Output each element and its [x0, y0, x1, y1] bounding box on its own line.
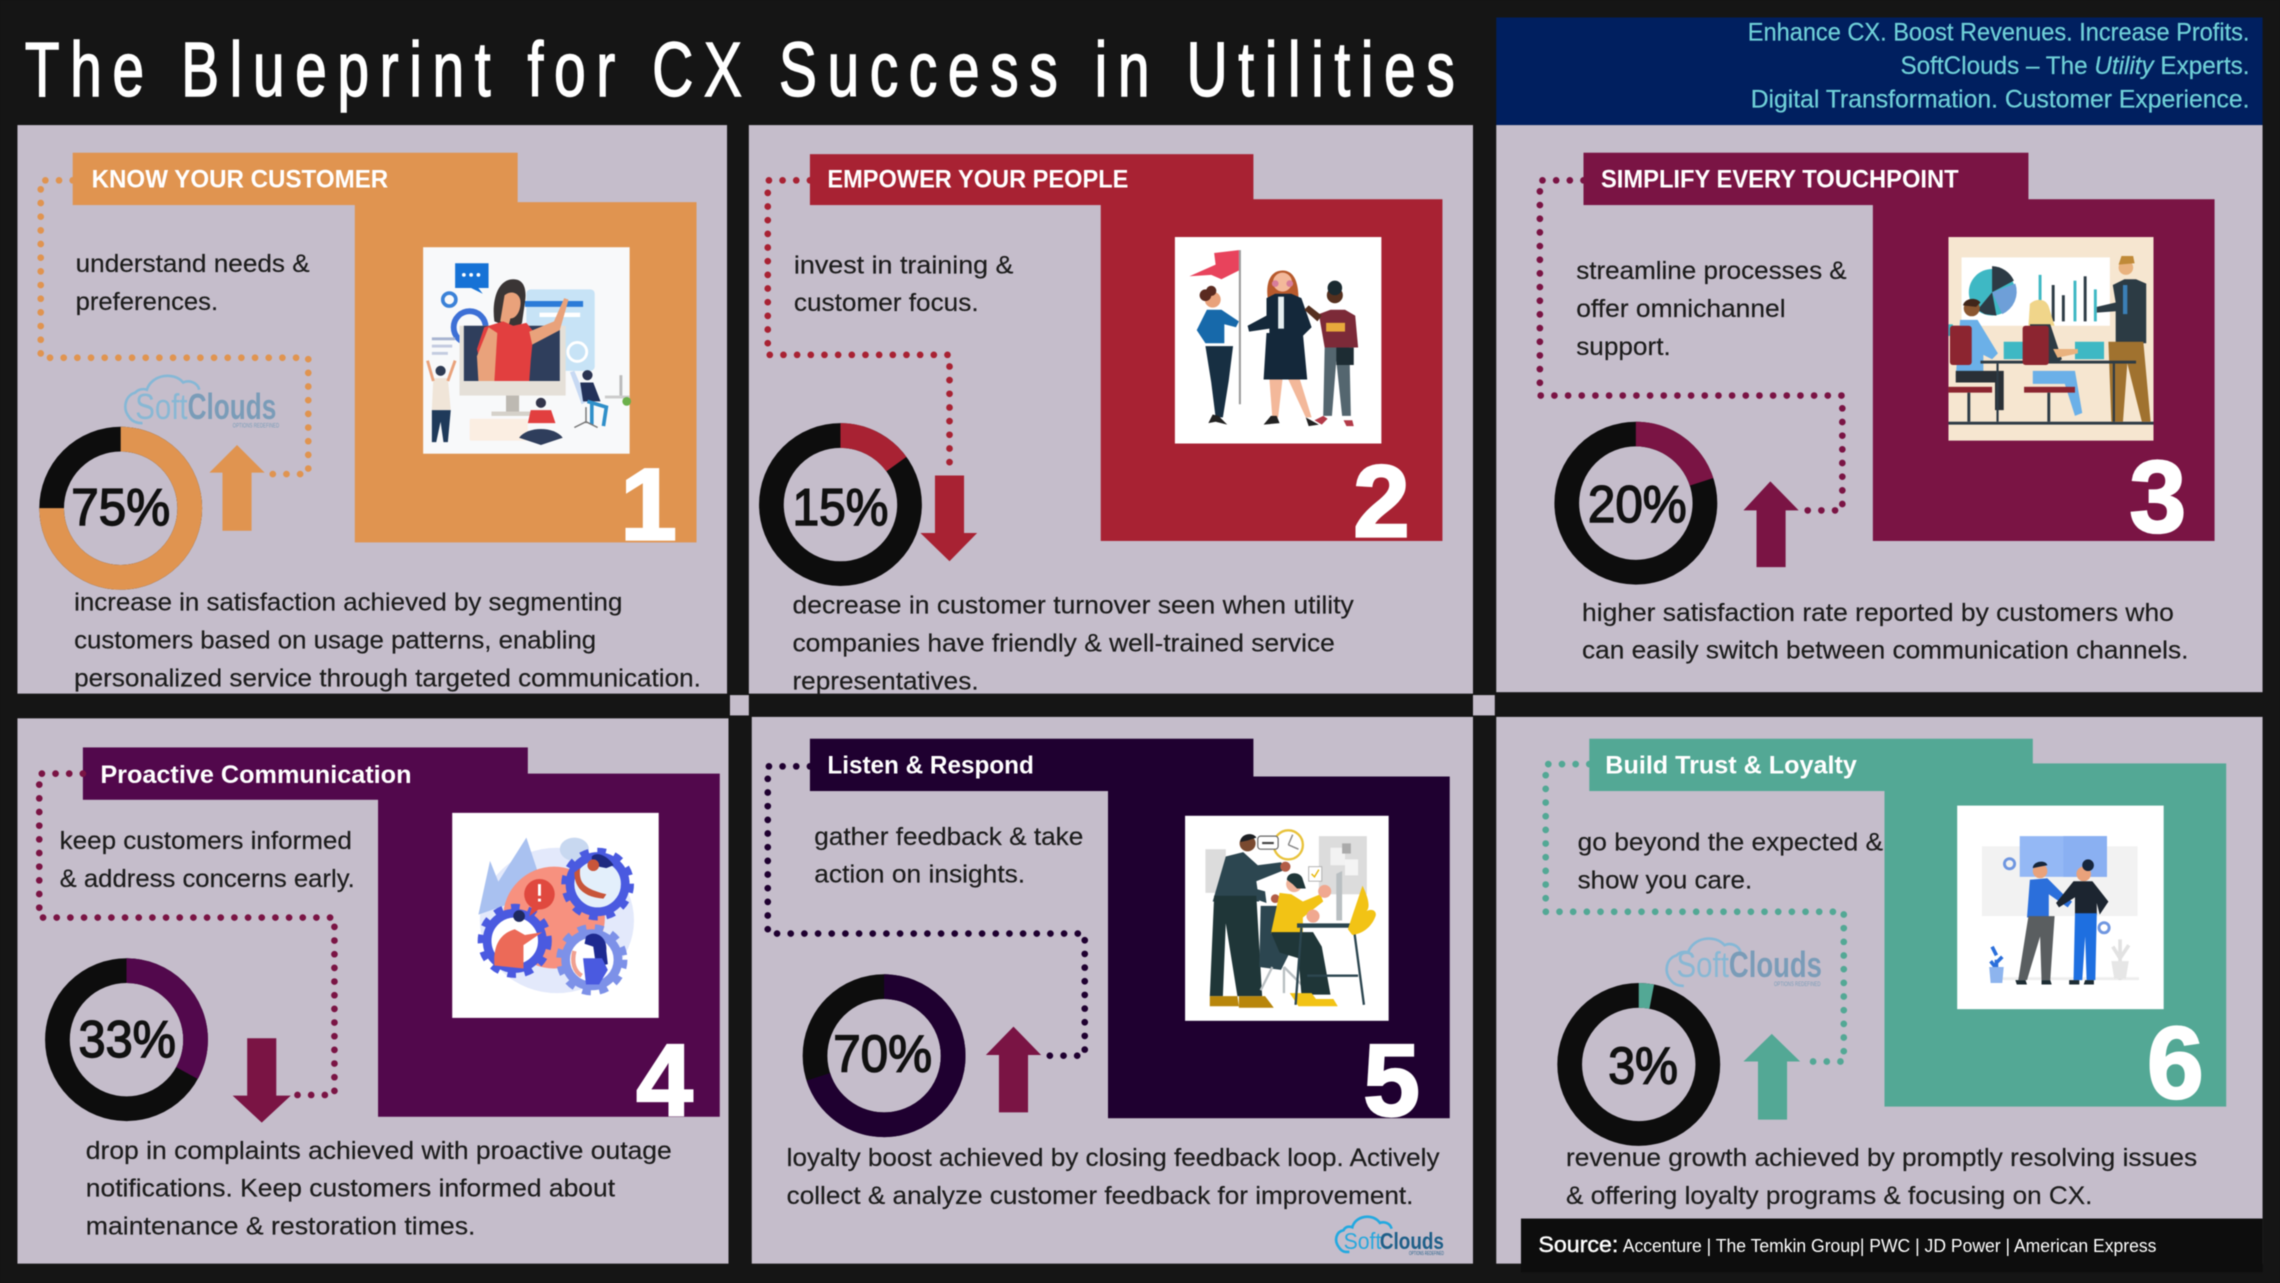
donut 75%: 75% — [71, 479, 170, 537]
text: 70% description: loyalty boost achieved by closing feedback loop. Actively — [787, 1145, 1440, 1172]
text: 33% description: maintenance & restoration times. — [86, 1214, 475, 1241]
dotted connector 3 — [1540, 180, 1842, 510]
panel 5: listen and respond — [752, 717, 1473, 1264]
number 4: 4 — [636, 1023, 693, 1137]
text: keep customers informed: & address concerns early. — [60, 866, 355, 893]
donut 15% — [771, 436, 910, 574]
heading 2: EMPOWER YOUR PEOPLE — [827, 167, 1128, 194]
dotted connector 2 — [768, 180, 950, 473]
heading 1: KNOW YOUR CUSTOMER — [92, 167, 388, 194]
donut 70% — [815, 987, 953, 1125]
heading 2 — [810, 154, 1253, 205]
illustration: meeting with charts — [1948, 237, 2153, 441]
heading 1 — [73, 153, 518, 205]
text: understand needs — [76, 251, 310, 316]
text: invest in training: invest in training & — [794, 252, 1014, 279]
source bar: Accenture | The Temkin Group| PWC | JD Power | American Express — [1623, 1236, 2156, 1256]
number 2: 2 — [1353, 445, 1410, 559]
text: 75% description — [74, 590, 701, 692]
text: 20% description — [1582, 600, 2188, 665]
logo: softclouds: Soft — [1344, 1228, 1382, 1254]
text: gather feedback: action on insights. — [814, 862, 1025, 889]
text: 15% description: companies have friendly & well-trained service — [792, 630, 1335, 657]
text: keep customers informed — [60, 828, 355, 893]
number 3: 3 — [2130, 440, 2186, 554]
donut 20% — [1567, 434, 1705, 572]
text: invest in training: customer focus. — [794, 290, 979, 317]
number 1: 1 — [620, 447, 677, 561]
tagline banner: SoftClouds – The Utility Experts. — [1900, 53, 2249, 80]
donut 75% — [52, 439, 190, 577]
text: invest in training — [794, 252, 1014, 317]
text: go beyond the expected: go beyond the expected & — [1578, 830, 1884, 857]
text: gather feedback — [814, 824, 1083, 889]
panel 1: know your customer — [17, 125, 727, 694]
text: 3% description: & offering loyalty programs & focusing on CX. — [1566, 1183, 2092, 1210]
number 5: 5 — [1363, 1023, 1420, 1137]
text: 3% description — [1566, 1145, 2197, 1210]
text: streamline processes — [1576, 258, 1847, 361]
donut 3% — [1570, 995, 1708, 1133]
text: 70% description: collect & analyze customer feedback for improvement. — [787, 1183, 1413, 1210]
text: 3% description: revenue growth achieved by promptly resolving issues — [1566, 1145, 2197, 1172]
text: 70% description — [787, 1145, 1440, 1210]
heading 6: Build Trust & Loyalty — [1605, 753, 1857, 780]
arrow up 3 — [1743, 481, 1799, 567]
text: 15% description: decrease in customer turnover seen when utility — [792, 593, 1354, 620]
text: gather feedback: gather feedback & take — [814, 824, 1083, 851]
arrow up 5 — [986, 1027, 1041, 1112]
text: go beyond the expected — [1578, 830, 1884, 894]
heading 3: SIMPLIFY EVERY TOUCHPOINT — [1601, 167, 1959, 194]
text: 33% description — [86, 1138, 672, 1241]
tagline banner: Digital Transformation. Customer Experience. — [1751, 87, 2249, 114]
text: 15% description — [792, 593, 1354, 695]
text: 33% description: drop in complaints achieved with proactive outage — [86, 1138, 672, 1165]
logo: softclouds faded — [125, 376, 279, 430]
number block 5 — [1108, 777, 1450, 1118]
text: understand needs: understand needs & — [76, 251, 310, 278]
heading 5: Listen & Respond — [827, 753, 1034, 780]
logo: softclouds faded: Clouds — [188, 386, 276, 427]
tagline banner — [1496, 17, 2263, 125]
donut 33% — [57, 971, 196, 1109]
donut 33%: 33% — [79, 1011, 176, 1069]
logo: softclouds: OPTIONS REDEFINED — [1409, 1251, 1444, 1257]
number block 3 — [1873, 199, 2215, 541]
illustration: gears with people — [452, 813, 659, 1018]
heading 4 — [83, 747, 528, 800]
text: keep customers informed: keep customers informed — [60, 828, 352, 855]
logo: softclouds — [1336, 1217, 1444, 1257]
donut 20%: 20% — [1588, 476, 1687, 534]
illustration: colleague review at desk — [1185, 816, 1389, 1021]
number block 6 — [1884, 763, 2226, 1107]
panel 3: simplify every touchpoint — [1496, 125, 2263, 692]
heading 6 — [1589, 739, 2033, 791]
arrow up 1 — [209, 445, 265, 531]
heading 3 — [1583, 153, 2028, 205]
text: understand needs: preferences. — [76, 289, 218, 316]
text: 20% description: higher satisfaction rate reported by customers who — [1582, 600, 2174, 627]
logo: softclouds faded 2: OPTIONS REDEFINED — [1774, 981, 1821, 988]
dotted connector 5 — [768, 766, 1085, 1056]
dotted connector 6 — [1546, 764, 1844, 1062]
illustration: customer support on monitor — [423, 247, 631, 454]
illustration: handshake and puzzle — [1957, 806, 2164, 1009]
source bar: Source: — [1538, 1232, 1618, 1257]
dotted connector 4 — [39, 774, 334, 1095]
number block 2 — [1101, 199, 1442, 541]
title: The Blueprint for CX Success in Utilities — [25, 28, 1455, 113]
logo: softclouds faded 2: Soft — [1677, 944, 1729, 985]
panel 4: proactive communication — [17, 718, 728, 1264]
logo: softclouds faded: OPTIONS REDEFINED — [233, 423, 279, 430]
logo: softclouds faded 2 — [1667, 939, 1822, 988]
dotted connector 1 — [41, 180, 308, 474]
text: 75% description: increase in satisfaction achieved by segmenting — [74, 590, 622, 617]
text: streamline processes: streamline processes & — [1576, 258, 1847, 285]
donut 3%: 3% — [1608, 1037, 1678, 1095]
heading 5 — [810, 739, 1253, 791]
donut 15%: 15% — [792, 479, 888, 537]
number block 4 — [378, 774, 720, 1117]
number 6: 6 — [2147, 1006, 2204, 1120]
logo: softclouds faded: Soft — [135, 386, 188, 427]
text: streamline processes: offer omnichannel — [1576, 296, 1786, 323]
number block 1 — [355, 202, 697, 542]
heading 4: Proactive Communication — [100, 762, 412, 789]
text: go beyond the expected: show you care. — [1578, 867, 1752, 894]
text: 20% description: can easily switch between communication channels. — [1582, 638, 2188, 665]
source bar — [1521, 1219, 2263, 1272]
text: 75% description: personalized service through targeted communication. — [74, 665, 701, 692]
panel 6: build trust and loyalty — [1496, 717, 2263, 1264]
tagline banner: Enhance CX. Boost Revenues. Increase Profits. — [1748, 20, 2249, 47]
panel 2: empower your people — [749, 125, 1473, 695]
arrow down 2 — [920, 476, 977, 561]
text: streamline processes: support. — [1576, 334, 1671, 361]
donut 70%: 70% — [833, 1026, 932, 1084]
text: 75% description: customers based on usage patterns, enabling — [74, 628, 596, 655]
arrow up 6 — [1743, 1034, 1800, 1120]
logo: softclouds faded 2: Clouds — [1729, 944, 1822, 985]
arrow down 4 — [233, 1038, 291, 1123]
logo: softclouds: Clouds — [1380, 1228, 1444, 1254]
text: 33% description: notifications. Keep customers informed about — [86, 1176, 615, 1203]
illustration: team with flag — [1175, 237, 1381, 444]
text: 15% description: representatives. — [792, 668, 979, 695]
